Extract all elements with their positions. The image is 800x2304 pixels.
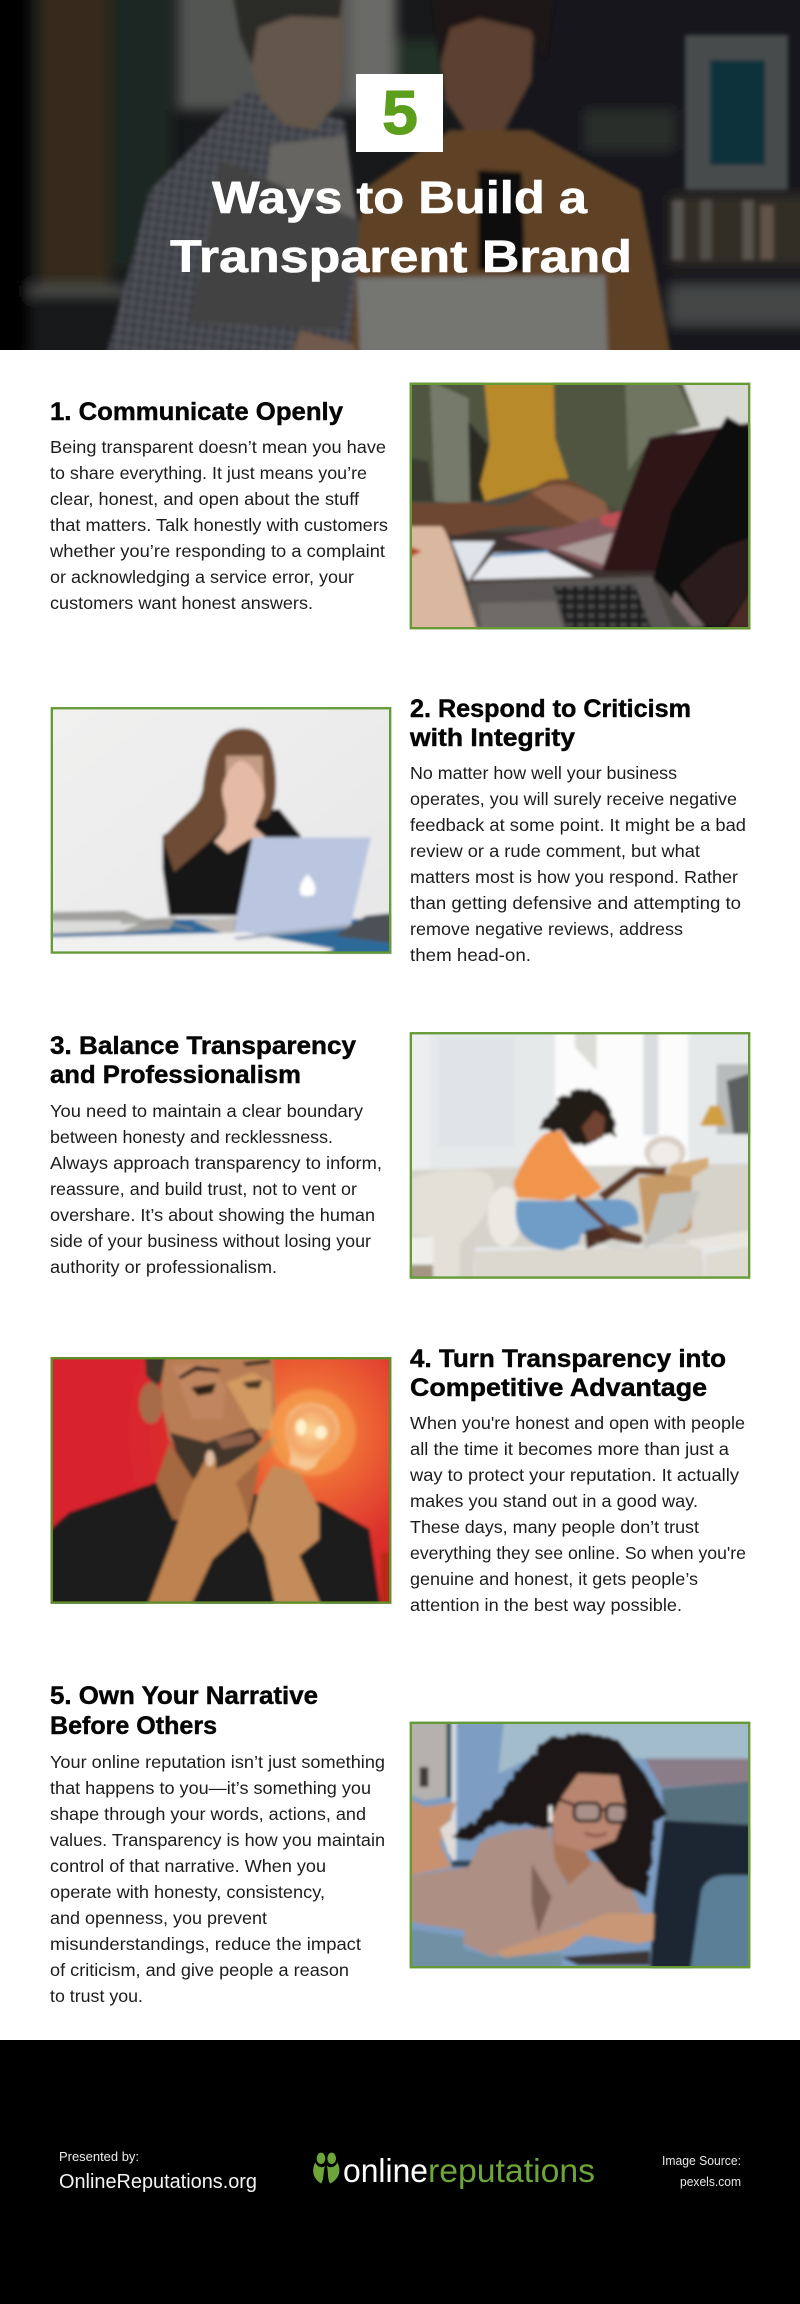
panel: step 4 competitive advantage: [39, 1345, 746, 1616]
panel: step 3 balance transparency: [50, 1021, 762, 1291]
body text: step 1: or acknowledging a service error, your: [50, 567, 354, 587]
heading: step 4: 4. Turn Transparency into: [410, 1345, 726, 1373]
title: [170, 172, 632, 282]
body text: step 1: [49, 437, 388, 613]
heading: step 4: Competitive Advantage: [410, 1374, 707, 1402]
number badge: 5: [382, 79, 418, 148]
image source: pexels.com: [680, 2174, 741, 2189]
image source: [662, 2153, 741, 2189]
photo: curly-haired woman with glasses on laptop: [410, 1722, 750, 1968]
heading: step 5: Before Others: [50, 1712, 217, 1740]
body text: step 3: overshare. It’s about showing the human: [50, 1205, 375, 1225]
heading: step 2: 2. Respond to Criticism: [410, 695, 691, 723]
body text: step 1: to share everything. It just means you’re: [50, 463, 367, 483]
footer: [0, 2040, 800, 2304]
body text: step 5: that happens to you—it’s something you: [50, 1778, 371, 1798]
body text: step 4: When you're honest and open with people: [410, 1413, 745, 1433]
logo: online reputations: reputations: [428, 2152, 595, 2189]
body text: step 4: all the time it becomes more than just a: [410, 1439, 729, 1459]
body text: step 1: clear, honest, and open about the stuff: [50, 489, 359, 509]
body text: step 5: [50, 1752, 385, 2006]
panel: step 1 communicate openly: [50, 382, 750, 630]
body text: step 2: review or a rude comment, but what: [410, 841, 700, 861]
body text: step 3: Always approach transparency to inform,: [50, 1153, 382, 1173]
heading: step 5: 5. Own Your Narrative: [50, 1682, 318, 1710]
body text: step 2: feedback at some point. It might be a bad: [410, 815, 746, 835]
body text: step 1: customers want honest answers.: [50, 593, 313, 613]
photo: hands on laptop at a meeting: [410, 382, 750, 630]
body text: step 5: control of that narrative. When you: [50, 1856, 326, 1876]
presented by: OnlineReputations.org: [59, 2171, 257, 2193]
body text: step 1: Being transparent doesn’t mean you have: [50, 437, 386, 457]
body text: step 3: between honesty and recklessness.: [50, 1127, 333, 1147]
body text: step 4: attention in the best way possible.: [410, 1595, 682, 1615]
photo: man looking at glowing light bulb: [50, 1357, 392, 1604]
body text: step 3: [50, 1101, 382, 1277]
body text: step 2: operates, you will surely receive negative: [410, 789, 737, 809]
logo: online reputations: online: [343, 2152, 428, 2189]
body text: step 5: and openness, you prevent: [50, 1908, 267, 1928]
heading: step 3: 3. Balance Transparency: [50, 1032, 356, 1060]
logo: online reputations: [313, 2152, 595, 2189]
panel: step 2 respond to criticism: [39, 695, 746, 966]
heading: step 1: 1. Communicate Openly: [50, 398, 343, 426]
heading: step 2: with Integrity: [409, 724, 575, 752]
body text: step 2: remove negative reviews, address: [410, 919, 683, 939]
header banner: [0, 0, 800, 370]
panel: step 5 own your narrative: [50, 1682, 762, 2006]
body text: step 3: side of your business without losing your: [50, 1231, 371, 1251]
body text: step 2: [410, 763, 746, 965]
body text: step 5: operate with honesty, consistency,: [50, 1882, 325, 1902]
body text: step 4: everything they see online. So when you're: [410, 1543, 746, 1563]
title: Ways to Build a: [212, 172, 588, 223]
title: Transparent Brand: [170, 231, 632, 282]
heading: step 3: [50, 1032, 356, 1089]
heading: step 3: and Professionalism: [50, 1061, 301, 1089]
body text: step 3: You need to maintain a clear boundary: [50, 1101, 363, 1121]
number badge: [356, 74, 443, 152]
body text: step 2: matters most is how you respond. Rather: [410, 867, 738, 887]
photo: woman on sofa with laptop and box: [410, 1032, 750, 1279]
body text: step 4: genuine and honest, it gets people’s: [410, 1569, 698, 1589]
body text: step 2: than getting defensive and attempting to: [410, 893, 741, 913]
body text: step 5: values. Transparency is how you maintain: [50, 1830, 385, 1850]
body text: step 5: shape through your words, actions, and: [50, 1804, 366, 1824]
presented by: Presented by:: [59, 2149, 139, 2164]
body text: step 1: that matters. Talk honestly with customers: [50, 515, 388, 535]
icon: two people: [313, 2153, 339, 2184]
body text: step 4: way to protect your reputation. It actually: [409, 1465, 739, 1485]
header photo: two colleagues with laptops: [0, 0, 800, 370]
body text: step 4: [409, 1413, 746, 1615]
body text: step 5: to trust you.: [50, 1986, 143, 2006]
body text: step 2: them head-on.: [410, 945, 531, 965]
heading: step 2: [409, 695, 691, 752]
body text: step 5: misunderstandings, reduce the impact: [50, 1934, 361, 1954]
body text: step 1: whether you’re responding to a complaint: [49, 541, 385, 561]
body text: step 2: No matter how well your business: [410, 763, 677, 783]
body text: step 3: authority or professionalism.: [50, 1257, 277, 1277]
body text: step 3: reassure, and build trust, not to vent or: [50, 1179, 357, 1199]
heading: step 4: [410, 1345, 726, 1402]
body text: step 5: Your online reputation isn’t just something: [50, 1752, 385, 1772]
heading: step 5: [50, 1682, 318, 1740]
photo: stressed woman at laptop: [50, 707, 392, 954]
body text: step 4: These days, many people don’t trust: [410, 1517, 699, 1537]
presented by: [59, 2149, 257, 2193]
image source: Image Source:: [662, 2153, 741, 2168]
body text: step 4: makes you stand out in a good way.: [410, 1491, 698, 1511]
body text: step 5: of criticism, and give people a reason: [50, 1960, 349, 1980]
